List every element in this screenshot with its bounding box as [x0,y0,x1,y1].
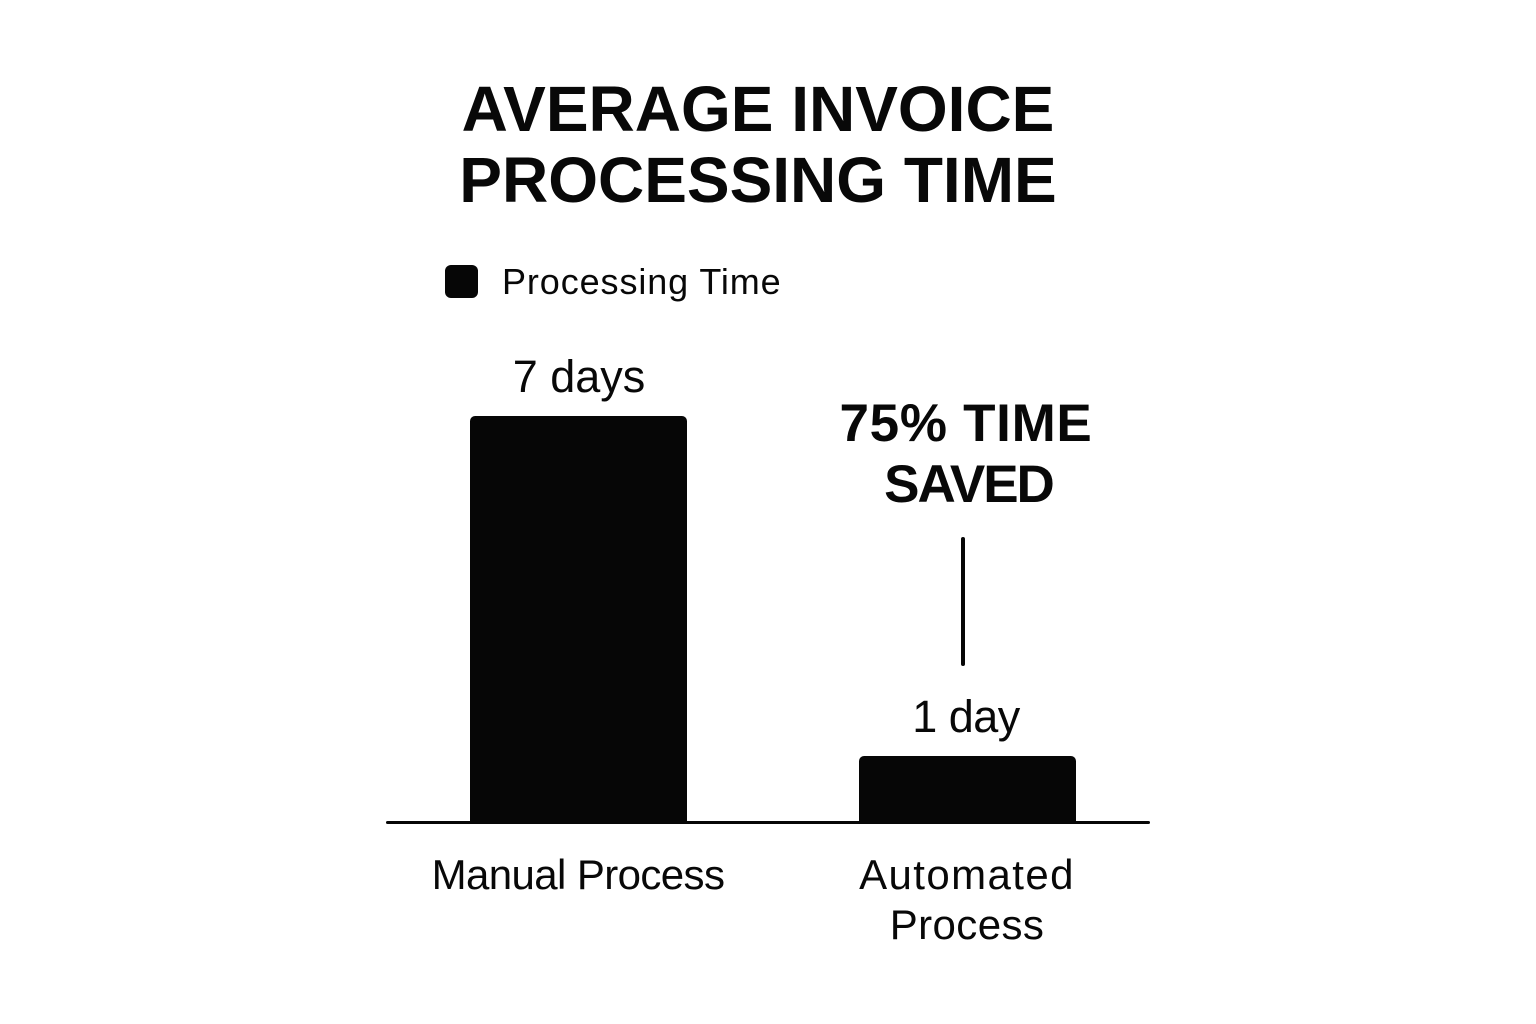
category label: manual process: Manual Process [432,851,724,898]
legend [445,261,782,302]
category label: automated process [859,851,1075,948]
title [459,73,1057,216]
callout: 75% time saved [839,394,1092,514]
category label: automated process: Automated [859,851,1075,898]
callout: 75% time saved: 75% TIME [839,394,1092,453]
bar: automated process [859,756,1076,824]
legend label: Processing Time [502,261,782,302]
category label: automated process: Process [890,901,1044,948]
callout connector line [961,537,965,666]
bar: manual process [470,416,687,824]
x axis [386,821,1150,824]
bar value: 1 day: 1 day [912,691,1020,742]
callout: 75% time saved: SAVED [884,455,1053,514]
title: PROCESSING TIME [459,144,1057,216]
title: AVERAGE INVOICE [462,73,1054,145]
bar value: 7 days: 7 days [513,351,645,402]
legend swatch [445,265,478,298]
